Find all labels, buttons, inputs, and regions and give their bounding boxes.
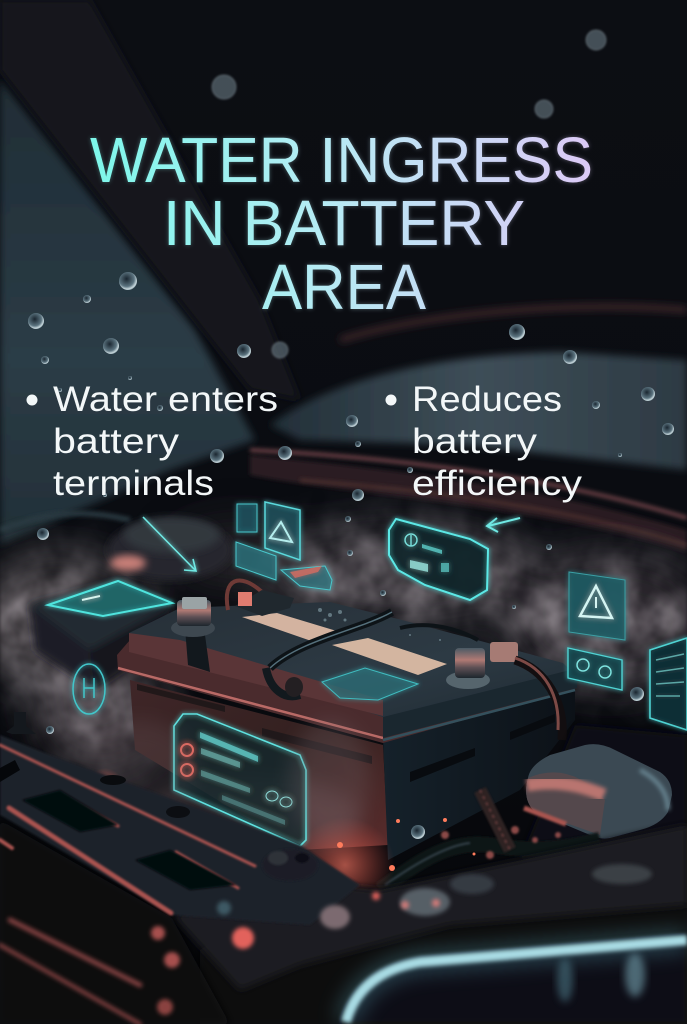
blurred droplets	[212, 30, 606, 358]
battery right face	[383, 690, 575, 860]
dark engine bay behind parts	[520, 725, 687, 860]
water spots on lid	[318, 608, 441, 641]
water droplets	[28, 272, 674, 839]
HUD: dial card right	[568, 648, 622, 690]
HUD: status panel upper right	[389, 519, 488, 600]
smoke clouds	[0, 525, 687, 765]
HUD: panel on battery lid	[322, 668, 418, 700]
left terminal	[171, 597, 215, 637]
bullet: reduces battery efficiency: efficiency	[412, 464, 583, 503]
front plate (foreground, left)	[0, 712, 360, 1024]
black hoses	[380, 840, 600, 890]
bullet: water enters battery terminals: Water enters	[53, 380, 278, 419]
battery top	[129, 602, 570, 717]
bolts	[100, 775, 126, 785]
metal canister	[526, 744, 672, 839]
raised hood left panel	[0, 80, 255, 545]
arrow: to terminals	[143, 517, 196, 571]
battery lid rim	[117, 640, 577, 743]
label strips	[242, 613, 340, 644]
battery left face	[130, 680, 388, 850]
right engine parts	[380, 725, 687, 890]
right hood panel	[270, 352, 687, 470]
HUD: warning card right	[569, 572, 625, 640]
HUD: panel on battery front	[174, 714, 306, 846]
embers and red glow	[85, 720, 476, 913]
bullet: water enters battery terminals	[26, 380, 278, 503]
back connector and cable	[227, 580, 294, 616]
right terminal with red cable	[446, 642, 562, 740]
HUD: warning icon cluster	[236, 502, 332, 590]
HUD: left module panel	[48, 581, 172, 616]
title: IN BATTERY	[163, 187, 525, 259]
HUD: round icon at left	[73, 664, 105, 714]
title	[90, 124, 593, 323]
bullet: reduces battery efficiency	[386, 380, 583, 503]
bullet: water enters battery terminals: battery	[53, 422, 180, 461]
bullet: water enters battery terminals: terminals	[53, 464, 214, 503]
plate cutouts	[22, 790, 118, 832]
title: AREA	[262, 251, 426, 323]
arrow: to status panel	[487, 518, 520, 532]
background cylinder and left module	[30, 517, 232, 690]
HUD: data card far right	[650, 638, 687, 730]
smoke veil on battery front	[140, 775, 360, 865]
bullet: reduces battery efficiency: Reduces	[412, 380, 562, 419]
cables on top	[270, 612, 392, 668]
bullet: reduces battery efficiency: battery	[412, 422, 538, 461]
red edge highlights	[0, 745, 255, 913]
title: WATER INGRESS	[90, 124, 593, 196]
bokeh lights foreground	[151, 892, 440, 1015]
foreground hood and headlight (right)	[172, 825, 687, 1024]
battery	[117, 580, 577, 865]
small bolt top-left	[6, 712, 36, 734]
vent slots	[137, 684, 225, 712]
